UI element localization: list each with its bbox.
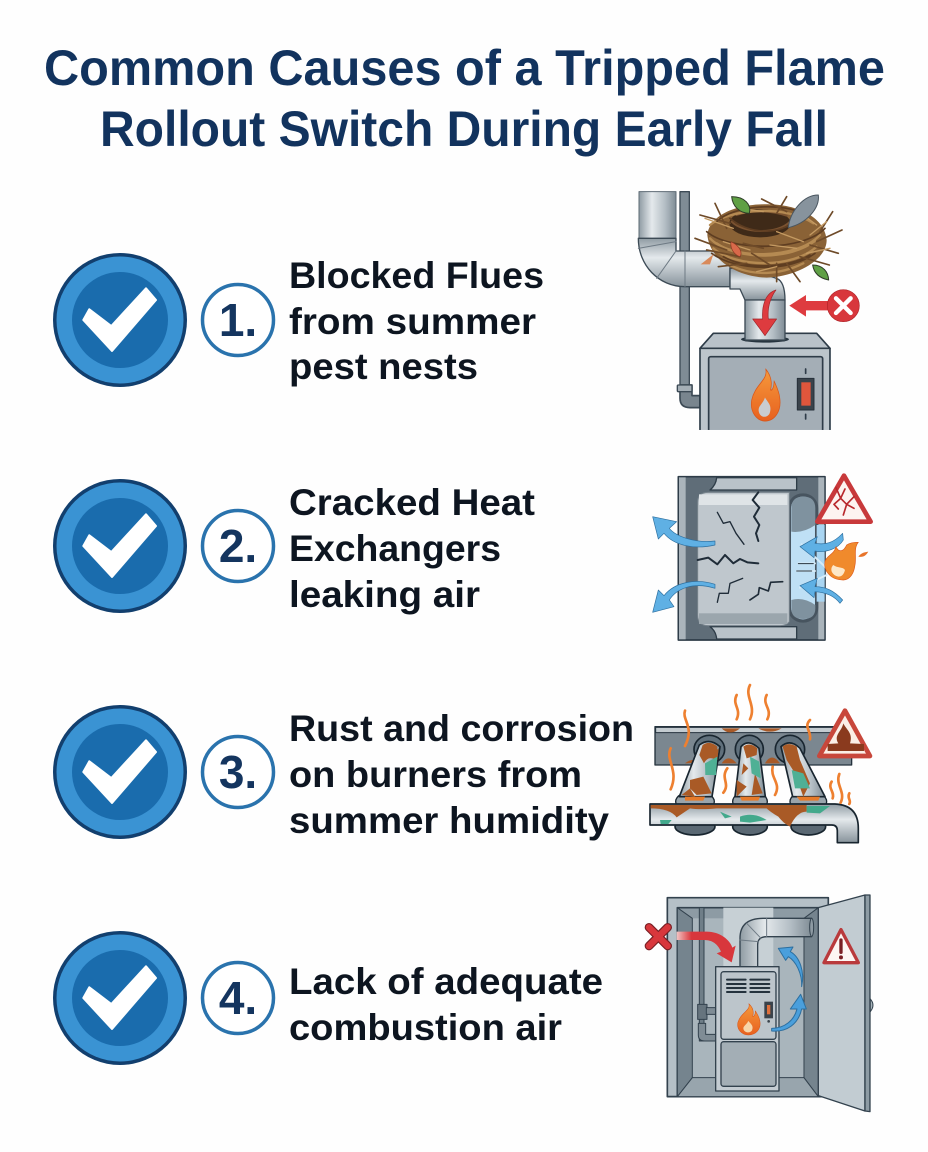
text: blocked flues: pest nests — [289, 345, 478, 387]
vertical flue pipe and elbow — [638, 192, 785, 408]
number badge 2 — [202, 510, 274, 582]
text: rust and corrosion: Rust and corrosion — [289, 707, 634, 749]
flue duct — [740, 918, 814, 967]
heat waves — [669, 685, 850, 804]
number badge 1: 1. — [219, 294, 257, 346]
flue collar — [741, 300, 789, 343]
title: Common Causes of a Tripped Flame — [44, 40, 885, 96]
item 4: lack of combustion air — [53, 895, 873, 1112]
item 2: cracked heat exchangers — [53, 476, 871, 640]
text: blocked flues — [289, 254, 544, 387]
number badge 3 — [202, 736, 274, 808]
rust patches on tubes — [682, 743, 820, 801]
text: rust and corrosion: summer humidity — [289, 799, 609, 841]
icon: red x and blocked air arrow — [649, 927, 736, 962]
icon: check badge 1 — [53, 253, 187, 387]
title — [44, 40, 885, 157]
text: lack of adequate combustion air — [289, 960, 603, 1048]
icon: check badge 2 — [53, 479, 187, 613]
icon: warning triangle — [819, 711, 870, 756]
illustration: furnace in closet — [649, 895, 873, 1112]
number badge 1 — [202, 284, 274, 356]
exchanger plate — [698, 492, 789, 626]
closet — [667, 898, 828, 1097]
number badge 4 — [202, 962, 274, 1034]
furnace cabinet — [630, 333, 883, 437]
burner rail — [655, 727, 852, 765]
cracks — [698, 492, 783, 602]
title: Rollout Switch During Early Fall — [100, 101, 828, 157]
text: cracked heat exchangers — [289, 481, 536, 615]
exchanger frame — [678, 477, 825, 640]
text: blocked flues: from summer — [289, 300, 536, 342]
text: rust and corrosion: on burners from — [289, 753, 582, 795]
icon: flame — [751, 369, 780, 421]
side channel with air — [789, 495, 827, 621]
arrows: air leaving — [653, 517, 843, 612]
icon: flame sparks — [825, 542, 868, 580]
nest — [695, 195, 842, 282]
text: lack of adequate combustion air: Lack of adequate — [289, 960, 603, 1002]
furnace — [716, 967, 779, 1091]
gas pipe — [698, 908, 717, 1041]
icon: warning triangle — [824, 930, 858, 963]
text: cracked heat exchangers: leaking air — [289, 573, 480, 615]
icon: warning triangle — [817, 476, 871, 522]
arrow: down flow — [753, 290, 777, 336]
icon: check badge 4 — [53, 931, 187, 1065]
icon: check badge 3 — [53, 705, 187, 839]
number badge 3: 3. — [219, 746, 257, 798]
item 1: blocked flues — [53, 192, 883, 437]
manifold pipe — [650, 804, 858, 843]
arrow and x marker — [789, 290, 859, 322]
text: lack of adequate combustion air: combustion air — [289, 1006, 562, 1048]
illustration: rusted burners — [650, 685, 870, 843]
icon: switch — [797, 369, 814, 419]
arrows: air flow — [772, 947, 806, 1031]
number badge 4: 4. — [219, 972, 257, 1024]
illustration: nest blocking furnace flue — [630, 192, 883, 437]
number badge 2: 2. — [219, 520, 257, 572]
leaves and feather — [701, 195, 829, 280]
icon: flame — [738, 1004, 760, 1035]
illustration: cracked heat exchanger — [653, 476, 871, 640]
text: cracked heat exchangers: Exchangers — [289, 527, 501, 569]
item 3: rust and corrosion — [53, 685, 870, 843]
burner tubes — [675, 735, 827, 835]
door — [818, 895, 873, 1112]
text: rust and corrosion — [289, 707, 634, 841]
text: cracked heat exchangers: Cracked Heat — [289, 481, 536, 523]
text: blocked flues: Blocked Flues — [289, 254, 544, 296]
